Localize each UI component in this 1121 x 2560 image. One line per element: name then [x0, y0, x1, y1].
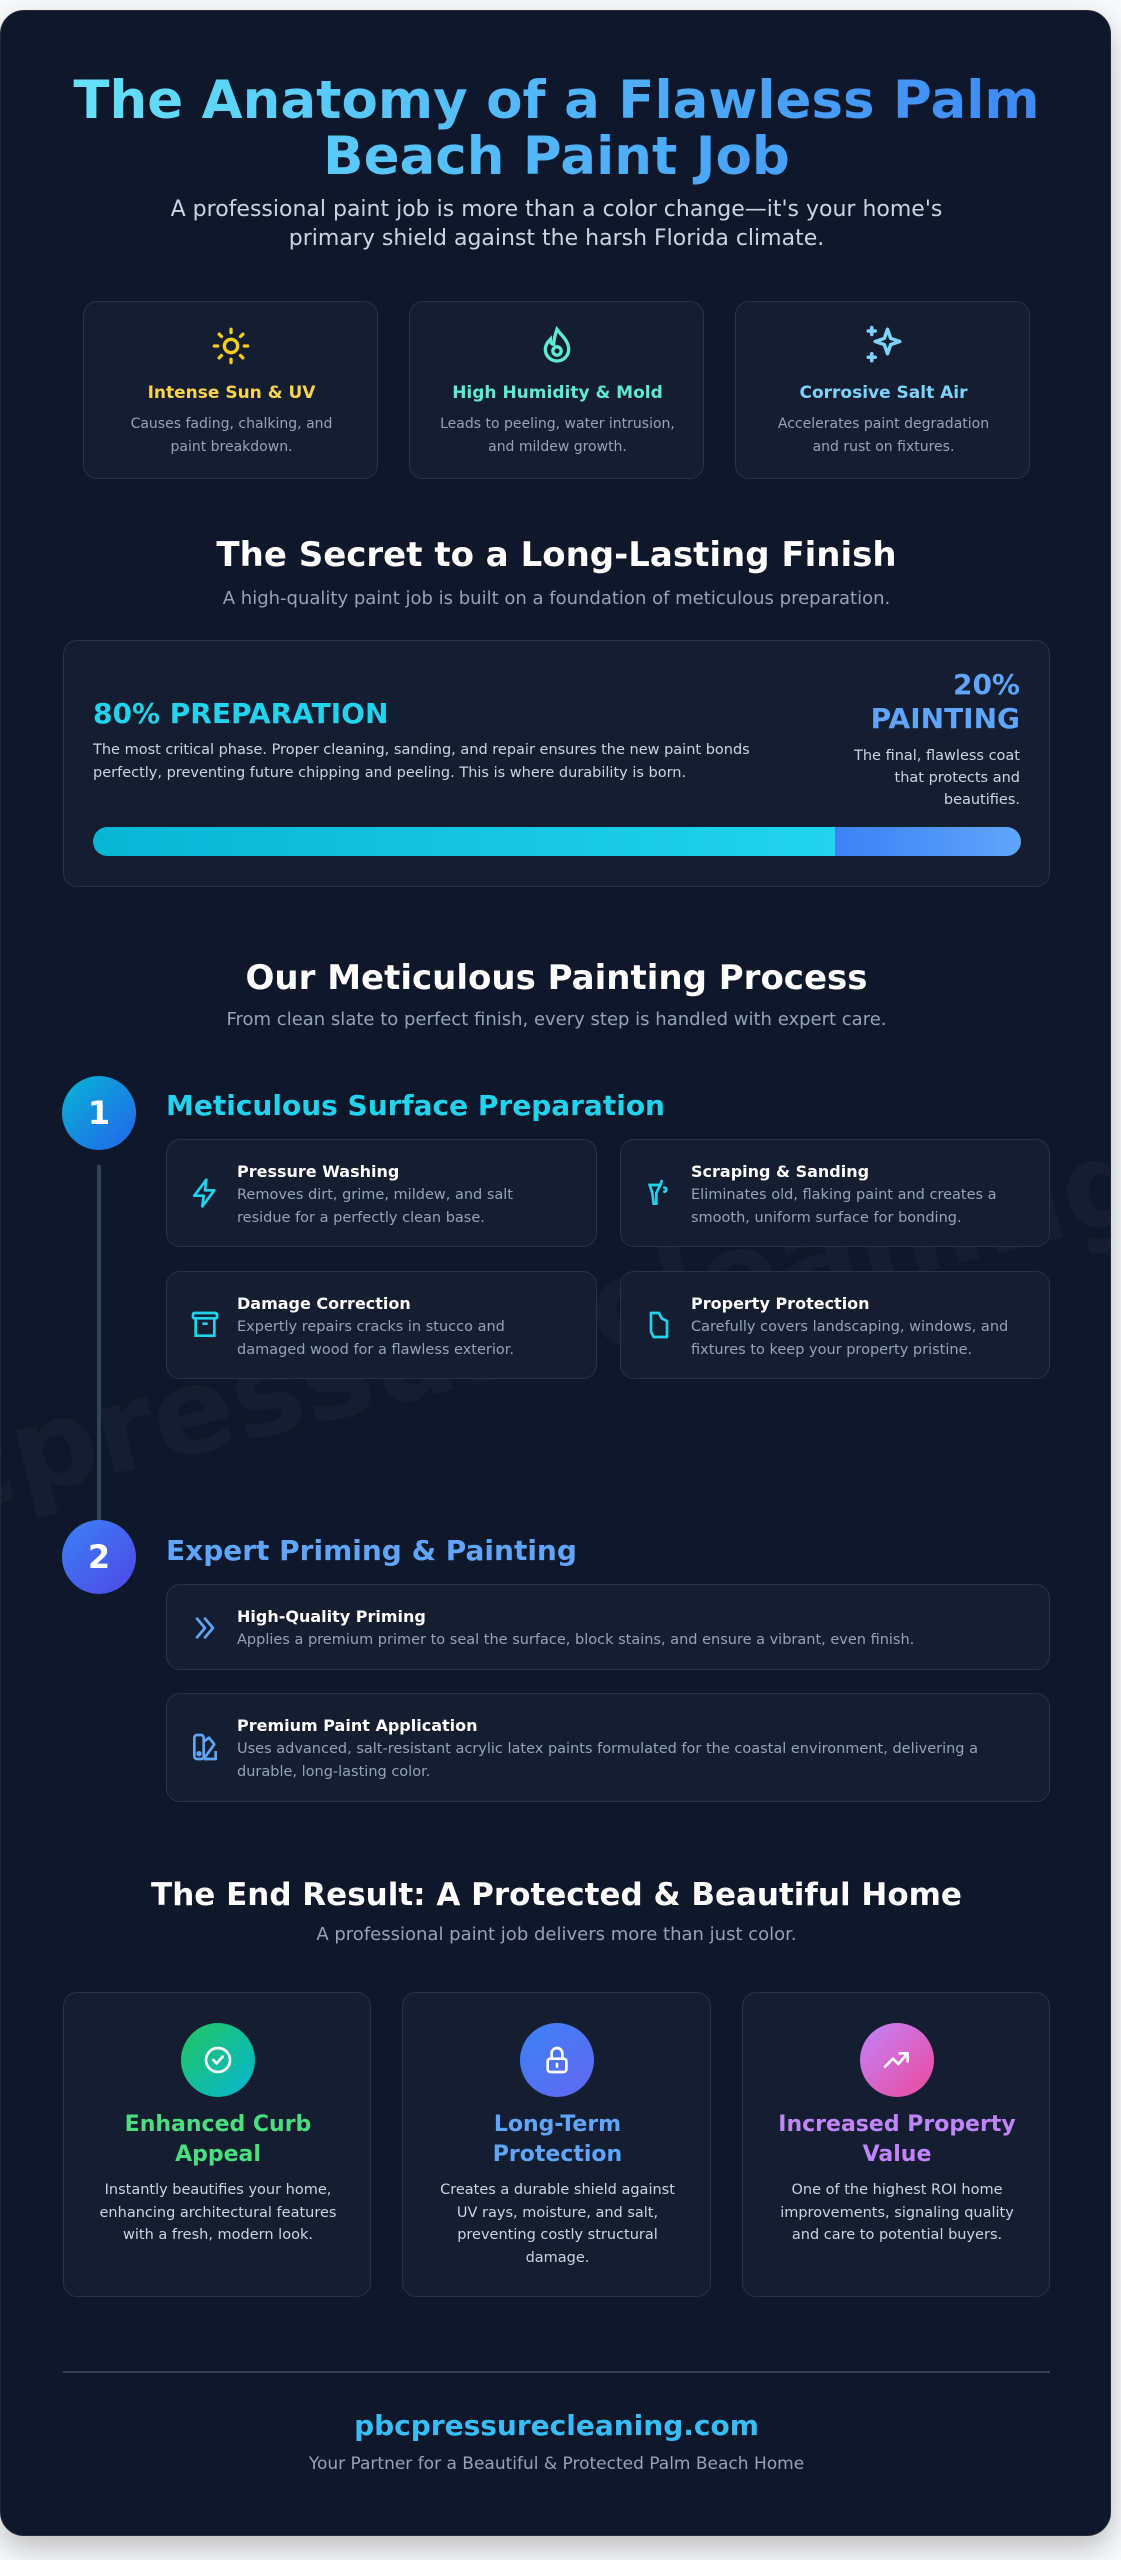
subheading: A professional paint job delivers more than just color. [316, 1924, 797, 1945]
subtitle [170, 197, 942, 251]
card: damage: Damage Correction [237, 1294, 411, 1313]
text [440, 416, 675, 455]
icon: scraper [648, 1180, 668, 1205]
step 1 circle: 1 [88, 1094, 110, 1132]
step 2 heading: Expert Priming & Painting [166, 1534, 577, 1567]
heading: secret: The Secret to a Long-Lasting Finish [216, 535, 897, 575]
text: Accelerates paint degradation [778, 416, 989, 432]
heading: Long-Term [494, 2112, 621, 2137]
card: paint application: Premium Paint Application [237, 1716, 478, 1735]
timeline line [97, 1165, 101, 1529]
text: paint breakdown. [170, 439, 293, 455]
text: Instantly beautifies your home, enhancing architectural features with a fresh, modern look. [100, 2182, 336, 2243]
card: priming: High-Quality Priming [237, 1607, 426, 1626]
subheading: From clean slate to perfect finish, every step is handled with expert care. [226, 1009, 887, 1030]
heading: end result: The End Result: A Protected & Beautiful Home [151, 1877, 962, 1913]
card: pressure washing: Pressure Washing [237, 1162, 399, 1181]
subheading: A high-quality paint job is built on a foundation of meticulous preparation. [223, 588, 890, 609]
panel: protection [402, 1992, 711, 2297]
step 1 heading: Meticulous Surface Preparation [166, 1089, 665, 1122]
icon: check circle [181, 2023, 255, 2097]
panel: curb appeal [63, 1992, 371, 2297]
text [778, 416, 989, 455]
step 1 circle [62, 1076, 136, 1150]
icon: drop [544, 326, 570, 363]
card: protection: fixtures to keep your property pristine. [691, 1342, 972, 1358]
text: and mildew growth. [488, 439, 627, 455]
card: protection: Property Protection [691, 1294, 870, 1313]
footer url: pbcpressurecleaning.com [354, 2409, 759, 2442]
icon: sun [212, 328, 250, 364]
text: Leads to peeling, water intrusion, [440, 416, 675, 432]
step 2 circle: 2 [88, 1538, 110, 1576]
card: damage: damaged wood for a flawless exterior. [237, 1342, 514, 1358]
icon: cover [650, 1312, 668, 1338]
label: 20%: 20% [953, 668, 1020, 701]
label: 20%: PAINTING [871, 702, 1020, 735]
icon: bolt [192, 1178, 216, 1208]
card: protection: Carefully covers landscaping, windows, and [691, 1319, 1008, 1335]
text: One of the highest ROI home improvements, signaling quality and care to potential buyers. [780, 2182, 1014, 2243]
panel: salt [735, 301, 1030, 479]
card: pressure washing: residue for a perfectly clean base. [237, 1210, 485, 1226]
card: damage [166, 1271, 597, 1379]
panel: 80/20 [63, 640, 1050, 887]
heading: Intense Sun & UV [148, 383, 315, 403]
icon: box [192, 1312, 218, 1337]
subtitle: primary shield against the harsh Florida climate. [289, 226, 824, 251]
text: and rust on fixtures. [813, 439, 954, 455]
bar chart [93, 827, 1021, 856]
heading: High Humidity & Mold [452, 383, 663, 403]
heading [778, 2112, 1016, 2167]
icon: chevrons [196, 1617, 214, 1639]
text: painting: The final, flawless coat that protects and beautifies. [854, 748, 1020, 808]
text: prep: The most critical phase. Proper cleaning, sanding, and repair ensures the new paint bonds perfectly, preventing future chipping and peeling. This is where durability is born. [93, 742, 750, 781]
card: paint application: Uses advanced, salt-resistant acrylic latex paints formulated for the coastal environment, delivering a [237, 1741, 978, 1757]
text [131, 416, 332, 455]
panel: humidity [409, 301, 704, 479]
heading [493, 2112, 622, 2167]
title: The Anatomy of a Flawless Palm [73, 70, 1040, 131]
card: priming: Applies a premium primer to seal the surface, block stains, and ensure a vibrant, even finish. [237, 1632, 914, 1648]
text: Causes fading, chalking, and [131, 416, 332, 432]
card: scraping: Eliminates old, flaking paint and creates a [691, 1187, 997, 1203]
label: 20% [871, 668, 1020, 735]
subtitle: A professional paint job is more than a color change—it's your home's [171, 197, 942, 222]
card: pressure washing [166, 1139, 597, 1247]
card: scraping [620, 1139, 1050, 1247]
icon: sparkle [866, 326, 902, 362]
card: protection [620, 1271, 1050, 1379]
heading: Value [863, 2142, 931, 2167]
heading: Enhanced Curb [125, 2112, 311, 2137]
heading: Increased Property [778, 2112, 1016, 2137]
title: Beach Paint Job [323, 126, 790, 187]
card: priming [166, 1584, 1050, 1670]
heading: process: Our Meticulous Painting Process [246, 958, 868, 998]
panel: sun [83, 301, 378, 479]
card: paint application [166, 1693, 1050, 1802]
panel: value [742, 1992, 1050, 2297]
label: 80%: 80% PREPARATION [93, 697, 388, 730]
heading: Corrosive Salt Air [799, 383, 968, 403]
heading [125, 2112, 311, 2167]
card: scraping: Scraping & Sanding [691, 1162, 869, 1181]
heading: Appeal [175, 2142, 261, 2167]
heading: Protection [493, 2142, 622, 2167]
icon: trend [860, 2023, 934, 2097]
card: scraping: smooth, uniform surface for bonding. [691, 1210, 962, 1226]
title [1, 73, 1112, 185]
card: paint application: durable, long-lasting color. [237, 1764, 430, 1780]
text: Creates a durable shield against UV rays, moisture, and salt, preventing costly structural damage. [440, 2182, 675, 2266]
icon: swatch [193, 1734, 217, 1760]
icon: lock [520, 2023, 594, 2097]
card: damage: Expertly repairs cracks in stucco and [237, 1319, 505, 1335]
card: pressure washing: Removes dirt, grime, mildew, and salt [237, 1187, 513, 1203]
footer tagline: Your Partner for a Beautiful & Protected Palm Beach Home [309, 2454, 804, 2474]
step 2 circle [62, 1520, 136, 1594]
